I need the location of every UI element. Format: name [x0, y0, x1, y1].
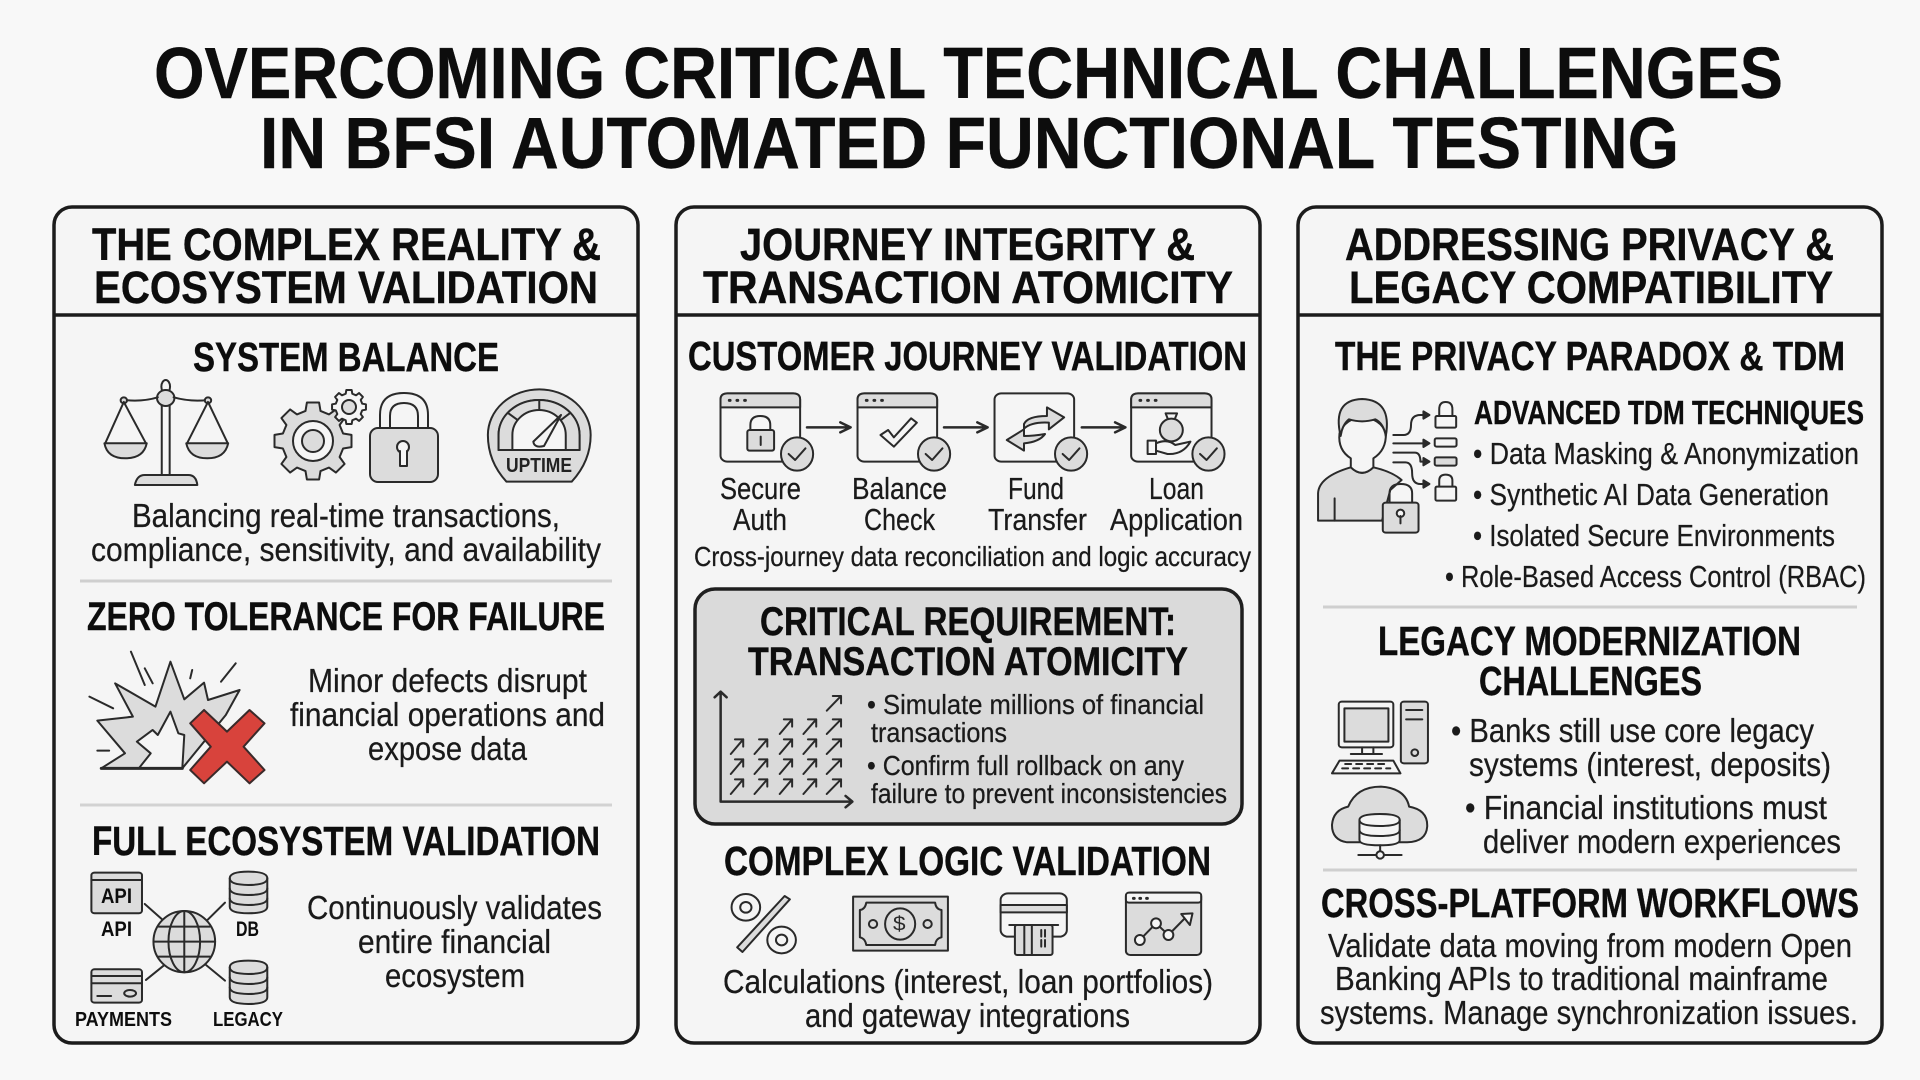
callout bullets: transactions: [871, 717, 1007, 748]
text: legacy modernization bullets: [1451, 712, 1841, 860]
text: ecosystem description: [307, 889, 602, 994]
icon: ecosystem network diagram: [75, 872, 284, 1031]
panel heading: ADDRESSING PRIVACY &: [1345, 219, 1834, 270]
text: zero tolerance description: Minor defects disrupt: [308, 662, 587, 699]
label: uptime: UPTIME: [506, 455, 572, 477]
labels: journey steps: Auth: [733, 502, 787, 537]
icon: balance scales: [104, 380, 228, 485]
labels: journey steps: Fund: [1008, 471, 1064, 506]
text: advanced TDM techniques: [1445, 394, 1866, 594]
icon: explosion with red cross: [89, 652, 265, 783]
callout heading: TRANSACTION ATOMICITY: [748, 640, 1188, 684]
icons: percent, banknote, card reader, chart window: [732, 893, 1201, 955]
labels: journey steps: Secure: [720, 471, 801, 506]
panel: addressing privacy and legacy compatibility: [1298, 207, 1882, 1043]
panel heading: LEGACY COMPATIBILITY: [1349, 262, 1833, 313]
icon: legacy desktop computer: [1332, 702, 1428, 773]
text: advanced TDM techniques: • Data Masking & Anonymization: [1473, 436, 1859, 471]
labels: journey steps: Check: [864, 502, 935, 537]
icon: ecosystem network diagram: DB: [236, 918, 259, 941]
text: system balance description: [91, 497, 601, 568]
panel: journey integrity and transaction atomicity: [676, 207, 1260, 1043]
panel heading: JOURNEY INTEGRITY &: [740, 219, 1195, 270]
text: zero tolerance description: expose data: [368, 730, 528, 767]
heading: legacy modernization challenges: LEGACY MODERNIZATION: [1378, 618, 1801, 664]
icons: percent, banknote, card reader, chart window: $: [893, 913, 906, 935]
icon: cloud database: [1332, 787, 1427, 859]
title: [154, 34, 1783, 184]
text: zero tolerance description: financial operations and: [290, 696, 605, 733]
callout: critical requirement transaction atomicity: [695, 589, 1242, 824]
text: cross-platform description: [1320, 927, 1858, 1031]
text: ecosystem description: entire financial: [358, 923, 551, 960]
title: OVERCOMING CRITICAL TECHNICAL CHALLENGES: [154, 34, 1783, 114]
text: legacy modernization bullets: systems (interest, deposits): [1469, 746, 1831, 783]
icon: person with data flows and locks: [1318, 399, 1457, 533]
heading: complex logic validation: COMPLEX LOGIC VALIDATION: [724, 838, 1211, 884]
text: complex logic description: Calculations (interest, loan portfolios): [723, 963, 1213, 1000]
panel heading: [1345, 219, 1834, 313]
panel heading: [703, 219, 1233, 313]
text: complex logic description: and gateway integrations: [805, 997, 1130, 1034]
labels: journey steps: Balance: [852, 471, 947, 506]
icon: ecosystem network diagram: API: [101, 918, 132, 941]
heading: full ecosystem validation: FULL ECOSYSTEM VALIDATION: [92, 818, 600, 864]
text: advanced TDM techniques: • Synthetic AI Data Generation: [1473, 477, 1829, 512]
text: legacy modernization bullets: • Banks still use core legacy: [1451, 712, 1814, 749]
icon: padlock: [370, 393, 438, 482]
heading: legacy modernization challenges: [1378, 618, 1801, 704]
panel heading: ECOSYSTEM VALIDATION: [94, 262, 598, 313]
text: advanced TDM techniques: • Isolated Secure Environments: [1473, 518, 1835, 553]
panel: the complex reality and ecosystem validation: [54, 207, 638, 1043]
icon: ecosystem network diagram: LEGACY: [213, 1009, 284, 1031]
heading: zero tolerance for failure: ZERO TOLERANCE FOR FAILURE: [87, 595, 605, 639]
callout bullets: [867, 689, 1227, 809]
flow: customer journey steps: [721, 393, 1225, 471]
labels: journey steps: Transfer: [988, 502, 1087, 537]
labels: journey steps: Loan: [1149, 471, 1204, 506]
text: system balance description: compliance, sensitivity, and availability: [91, 531, 601, 568]
callout heading: CRITICAL REQUIREMENT:: [760, 600, 1176, 644]
icon: ecosystem network diagram: PAYMENTS: [75, 1009, 172, 1031]
panel heading: [92, 219, 601, 313]
text: cross-platform description: systems. Manage synchronization issues.: [1320, 994, 1858, 1031]
text: zero tolerance description: [290, 662, 605, 767]
text: system balance description: Balancing real-time transactions,: [132, 497, 560, 534]
text: legacy modernization bullets: • Financial institutions must: [1465, 789, 1827, 826]
text: cross-journey note: Cross-journey data reconciliation and logic accuracy: [694, 541, 1251, 572]
panel heading: TRANSACTION ATOMICITY: [703, 262, 1233, 313]
panel heading: THE COMPLEX REALITY &: [92, 219, 601, 270]
title: IN BFSI AUTOMATED FUNCTIONAL TESTING: [260, 104, 1679, 184]
text: cross-platform description: Validate data moving from modern Open: [1328, 927, 1852, 964]
text: cross-platform description: Banking APIs to traditional mainframe: [1335, 960, 1828, 997]
callout bullets: failure to prevent inconsistencies: [871, 778, 1227, 809]
heading: legacy modernization challenges: CHALLENGES: [1479, 658, 1702, 704]
heading: system balance: SYSTEM BALANCE: [193, 334, 499, 380]
labels: journey steps: [720, 471, 1243, 537]
text: legacy modernization bullets: deliver modern experiences: [1483, 823, 1841, 860]
text: complex logic description: [723, 963, 1213, 1034]
text: ecosystem description: Continuously validates: [307, 889, 602, 926]
icon: ecosystem network diagram: API: [101, 885, 132, 908]
callout bullets: • Confirm full rollback on any: [867, 750, 1184, 781]
labels: journey steps: Application: [1110, 502, 1243, 537]
text: ecosystem description: ecosystem: [385, 957, 525, 994]
icon: gears: [274, 390, 366, 480]
icon: uptime gauge: [488, 389, 591, 482]
heading: customer journey validation: CUSTOMER JOURNEY VALIDATION: [688, 333, 1247, 379]
chart: rising transaction arrows: [715, 692, 852, 807]
callout bullets: • Simulate millions of financial: [867, 689, 1204, 720]
callout heading: [748, 600, 1188, 684]
